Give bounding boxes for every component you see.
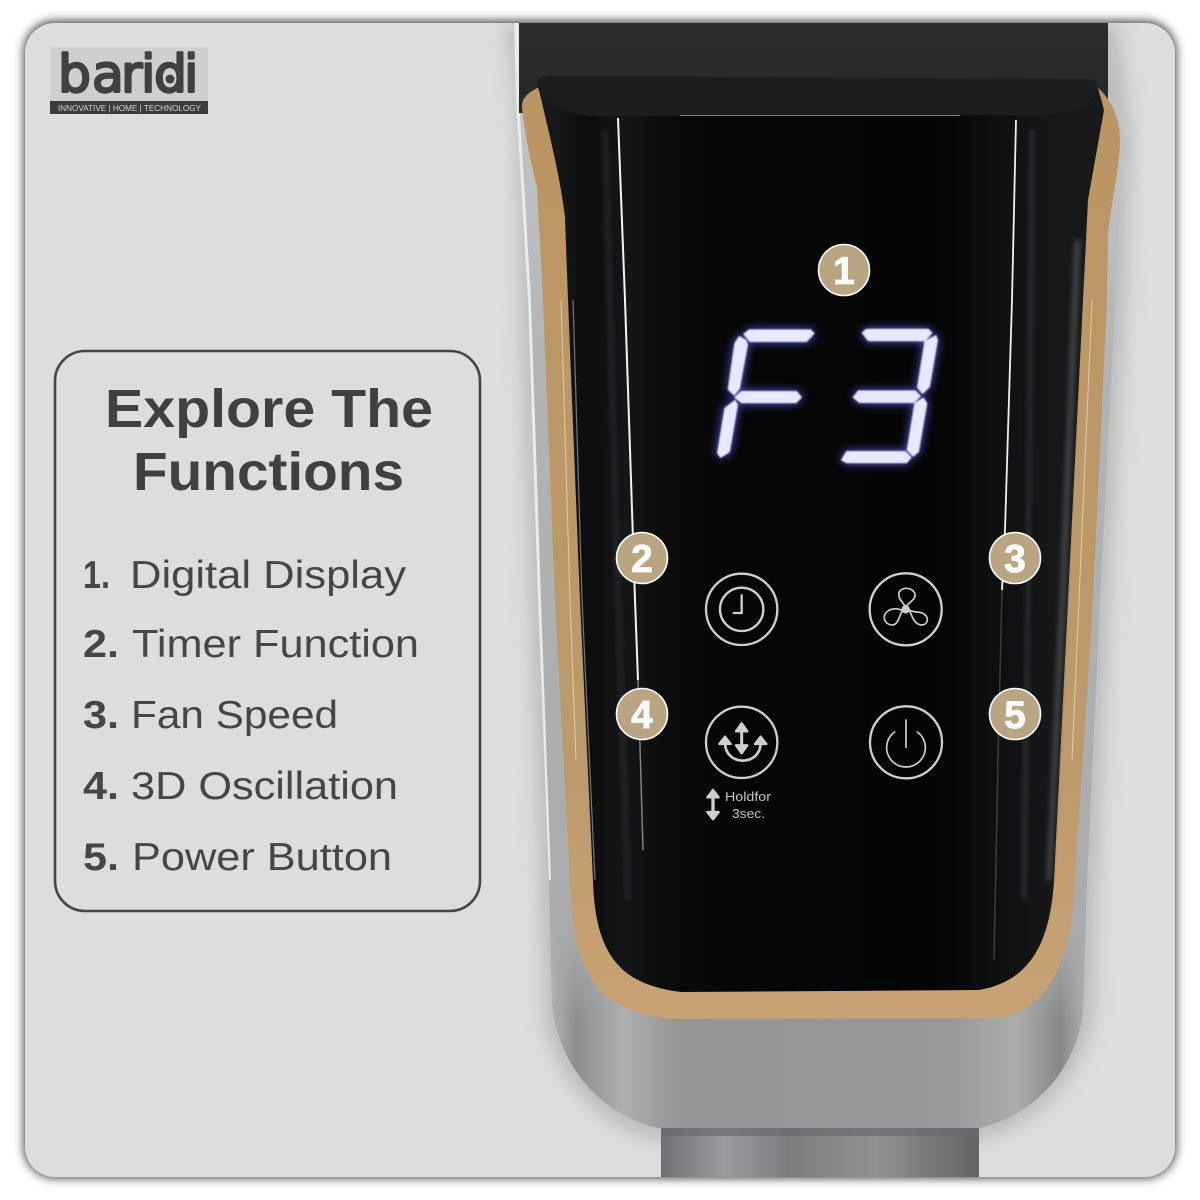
badge 3: 3	[1004, 538, 1026, 581]
item 2: Timer Function	[132, 623, 419, 666]
logo background	[50, 47, 208, 101]
gold highlights	[561, 300, 1092, 760]
item 4: 3D Oscillation	[131, 765, 398, 808]
gloss highlight left lower	[638, 680, 643, 850]
badge 4: 4	[631, 694, 653, 737]
digital display F3	[718, 329, 937, 463]
logo wordmark: baridi	[58, 45, 198, 105]
hold for 3 sec label	[725, 790, 771, 821]
badge 3	[990, 532, 1040, 584]
hold for 3 sec label: 3sec.	[732, 807, 765, 821]
badge 2	[616, 532, 668, 584]
item 5: Power Button	[132, 836, 392, 879]
top cap	[537, 76, 1098, 116]
logo tagline: INNOVATIVE | HOME | TECHNOLOGY	[58, 104, 202, 113]
fan control head product image	[500, 23, 1140, 1177]
gloss highlight inner left	[573, 300, 595, 880]
logo d target dot	[166, 74, 174, 84]
icon: power	[870, 706, 942, 778]
gloss streak right	[1024, 130, 1032, 900]
neck top shadow	[670, 1128, 938, 1136]
gloss grey band right	[1046, 240, 1081, 880]
badge 5: 5	[1004, 694, 1026, 737]
heading	[105, 379, 433, 502]
heading: Functions	[133, 442, 404, 502]
gloss highlight left	[618, 118, 638, 680]
panel outline	[55, 351, 480, 911]
cap lower light edge	[680, 115, 960, 116]
icon: hold arrow	[707, 790, 719, 819]
icon: 3D oscillation	[706, 707, 777, 778]
gloss panel	[539, 88, 1104, 992]
gloss highlight right	[1002, 120, 1016, 590]
item 3: Fan Speed	[131, 694, 338, 737]
badge 2: 2	[631, 538, 653, 581]
hold for 3 sec label: Holdfor	[725, 790, 771, 804]
icon: fan speed	[870, 573, 942, 645]
logo	[50, 45, 208, 114]
gold trim	[522, 88, 1120, 1019]
logo tagline bar	[50, 101, 208, 114]
heading: Explore The	[105, 379, 433, 439]
item 5: 5.	[83, 836, 119, 879]
badge 5	[990, 688, 1040, 740]
badge 1: 1	[833, 250, 855, 293]
item 1: Digital Display	[130, 554, 407, 597]
item 4: 4.	[83, 765, 119, 808]
gloss streak left	[605, 130, 628, 900]
support neck	[661, 1128, 979, 1177]
silver housing lower shading	[558, 954, 1080, 1128]
silver housing pale left edge	[514, 23, 551, 880]
control icons	[706, 573, 942, 819]
upper dark strap	[519, 23, 1108, 113]
badge 1	[818, 244, 870, 296]
silver housing	[531, 92, 1114, 988]
icon: timer clock	[706, 574, 777, 645]
gloss highlight lower right	[994, 590, 1002, 960]
badge 4	[616, 688, 668, 740]
item 3: 3.	[83, 694, 119, 737]
panel: functions list	[55, 351, 480, 911]
item 2: 2.	[83, 623, 119, 666]
item 1: 1.	[83, 554, 110, 597]
